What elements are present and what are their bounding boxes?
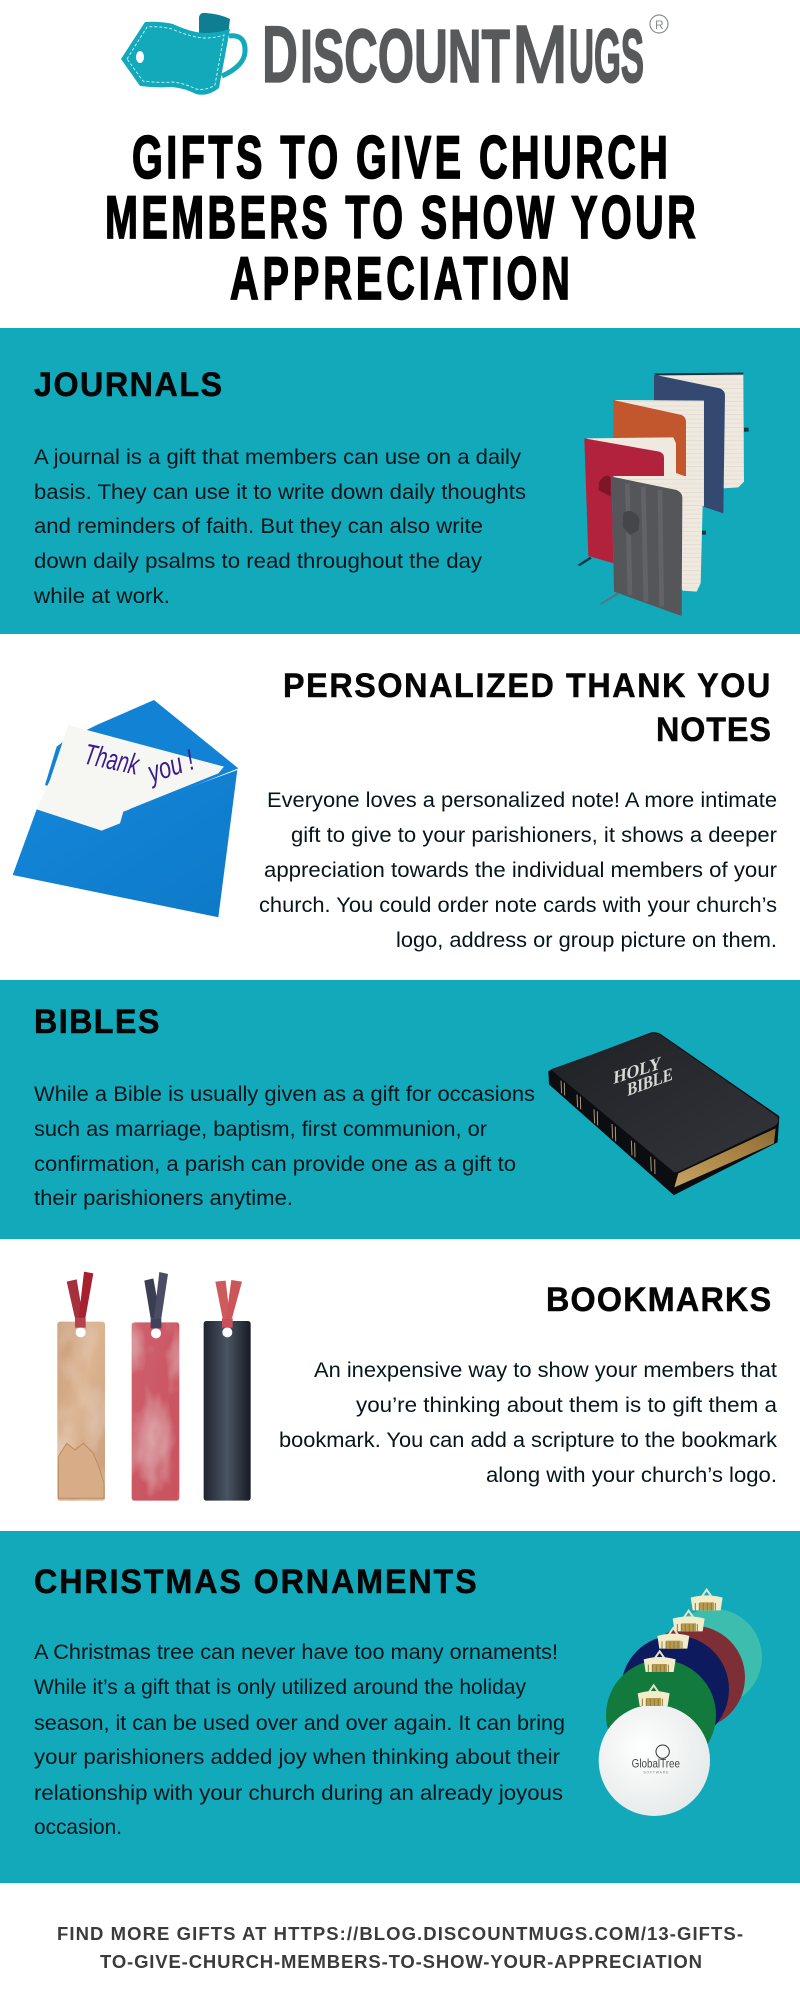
panel: bibles bbox=[0, 980, 800, 1239]
heading: bookmarks: BOOKMARKS bbox=[546, 1281, 771, 1319]
logo: DiscountMugs bbox=[121, 10, 668, 100]
panel: personalized thank you notes bbox=[13, 667, 777, 952]
icon: blue envelope with note: you ! bbox=[142, 744, 198, 790]
heading: bibles: BIBLES bbox=[34, 1003, 159, 1041]
text: personalized notes: appreciation towards the individual members of your bbox=[264, 858, 777, 882]
text: bookmarks: along with your church’s logo. bbox=[486, 1463, 777, 1487]
icon: ornaments bbox=[599, 1590, 762, 1816]
logo wordmark: ISCOUNT bbox=[300, 14, 510, 98]
text: christmas ornaments: A Christmas tree can never have too many ornaments! bbox=[34, 1640, 558, 1664]
text: personalized notes: church. You could order note cards with your church’s bbox=[259, 893, 777, 917]
text: bibles: their parishioners anytime. bbox=[34, 1186, 293, 1210]
icon: holy bible bbox=[549, 1033, 778, 1194]
text: bibles: While a Bible is usually given as a gift for occasions bbox=[34, 1082, 535, 1106]
icon: journals photo bbox=[577, 373, 749, 616]
text: bibles: confirmation, a parish can provide one as a gift to bbox=[34, 1152, 516, 1176]
logo wordmark: R bbox=[655, 18, 664, 32]
text: bookmarks bbox=[279, 1358, 777, 1487]
text: journals: down daily psalms to read throughout the day bbox=[34, 549, 482, 573]
logo wordmark: M bbox=[512, 10, 568, 100]
text: bookmarks: bookmark. You can add a scripture to the bookmark bbox=[279, 1428, 777, 1452]
icon: mug tag bbox=[121, 13, 245, 95]
heading: personalized thank you notes: PERSONALIZED THANK YOU bbox=[283, 667, 770, 705]
panel: bookmarks bbox=[57, 1272, 777, 1501]
text: personalized notes: Everyone loves a personalized note! A more intimate bbox=[267, 788, 777, 812]
text: journals: A journal is a gift that members can use on a daily bbox=[34, 445, 521, 469]
heading: journals: JOURNALS bbox=[34, 366, 222, 404]
title: MEMBERS TO SHOW YOUR bbox=[105, 184, 696, 251]
icon: holy bible: HOLY bbox=[613, 1052, 662, 1088]
text: christmas ornaments bbox=[34, 1640, 565, 1839]
icon: ornaments: SOFTWARE bbox=[643, 1770, 669, 1774]
footer link: TO-GIVE-CHURCH-MEMBERS-TO-SHOW-YOUR-APPRECIATION bbox=[100, 1951, 702, 1972]
text: bibles: such as marriage, baptism, first communion, or bbox=[34, 1117, 487, 1141]
logo wordmark: UGS bbox=[569, 14, 644, 98]
text: christmas ornaments: While it’s a gift that is only utilized around the holiday bbox=[34, 1675, 526, 1699]
text: bibles bbox=[34, 1082, 535, 1210]
heading: personalized thank you notes: NOTES bbox=[656, 711, 771, 749]
icon: blue envelope with note bbox=[13, 700, 238, 917]
footer link: FIND MORE GIFTS AT HTTPS://BLOG.DISCOUNTMUGS.COM/13-GIFTS- bbox=[57, 1923, 743, 1944]
title bbox=[105, 124, 696, 312]
text: christmas ornaments: season, it can be used over and over again. It can bring bbox=[34, 1711, 565, 1735]
footer link bbox=[57, 1923, 743, 1972]
text: christmas ornaments: occasion. bbox=[34, 1815, 122, 1839]
heading: personalized thank you notes bbox=[283, 667, 771, 749]
icon: three bookmarks bbox=[57, 1272, 251, 1501]
text: personalized notes bbox=[259, 788, 777, 952]
text: bookmarks: An inexpensive way to show your members that bbox=[314, 1358, 777, 1382]
icon: holy bible: BIBLE bbox=[627, 1063, 673, 1100]
text: bookmarks: you’re thinking about them is to gift them a bbox=[356, 1393, 777, 1417]
title: GIFTS TO GIVE CHURCH bbox=[132, 124, 668, 191]
text: journals: basis. They can use it to write down daily thoughts bbox=[34, 480, 526, 504]
panel: christmas ornaments bbox=[0, 1531, 800, 1883]
panel: journals bbox=[0, 328, 800, 634]
text: personalized notes: logo, address or group picture on them. bbox=[396, 928, 777, 952]
text: christmas ornaments: your parishioners added joy when thinking about their bbox=[34, 1745, 560, 1769]
text: christmas ornaments: relationship with your church during an already joyous bbox=[34, 1781, 563, 1805]
icon: blue envelope with note: Thank bbox=[81, 738, 143, 782]
text: personalized notes: gift to give to your parishioners, it shows a deeper bbox=[291, 823, 777, 847]
logo wordmark: D bbox=[262, 10, 298, 100]
title: APPRECIATION bbox=[230, 245, 570, 312]
text: journals: while at work. bbox=[33, 584, 170, 608]
icon: ornaments: GlobalTree bbox=[632, 1756, 680, 1770]
text: journals: and reminders of faith. But they can also write bbox=[34, 514, 483, 538]
heading: christmas ornaments: CHRISTMAS ORNAMENTS bbox=[34, 1563, 477, 1601]
text: journals bbox=[33, 445, 526, 608]
